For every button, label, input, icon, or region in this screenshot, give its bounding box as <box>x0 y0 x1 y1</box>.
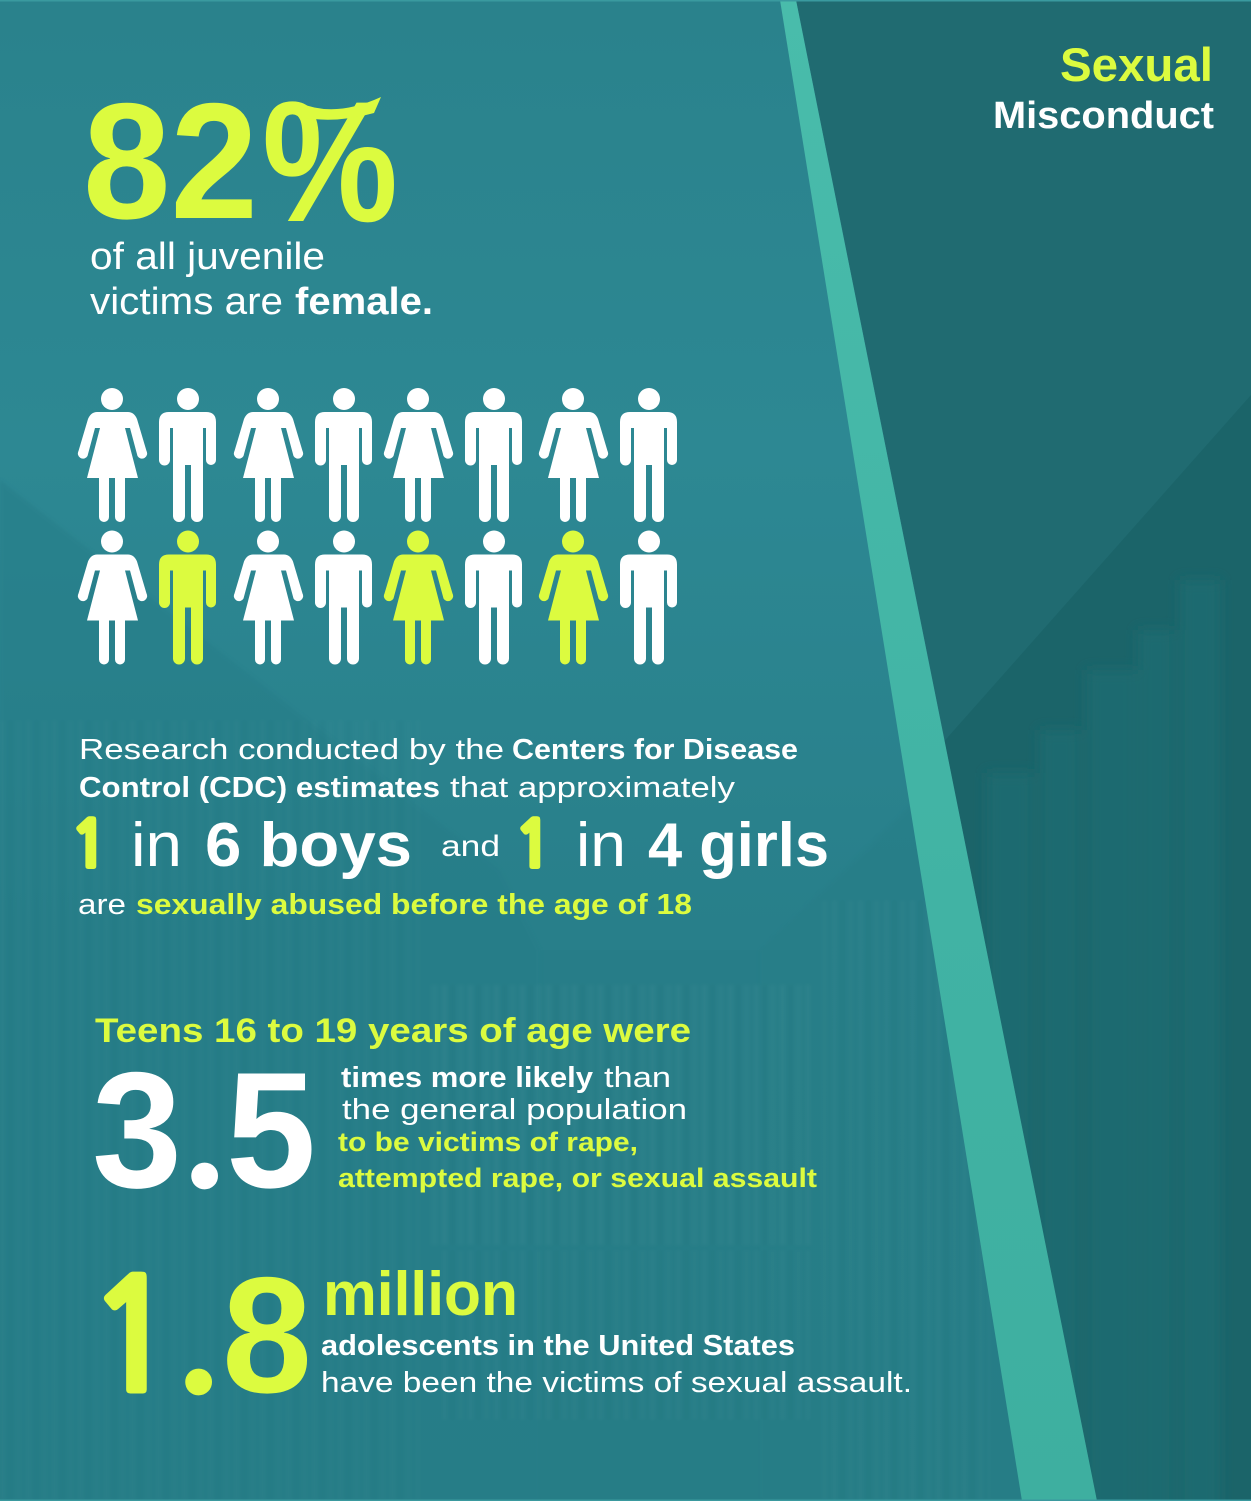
stat: 1 in 6 boys and 1 in 4 girls: and <box>441 830 500 863</box>
text block: CDC research: sexually abused before the age of 18 <box>136 889 692 921</box>
figure: row 2, 7 highlighted <box>539 530 608 664</box>
stat: 1 in 6 boys and 1 in 4 girls: 4 girls <box>648 811 829 880</box>
text block: CDC research <box>70 734 829 921</box>
stat: 1.8 million adolescents: have been the victims of sexual assault. <box>321 1367 912 1399</box>
stat: 1 in 6 boys and 1 in 4 girls: in <box>131 811 182 880</box>
figure: row 1, 2 <box>159 388 216 522</box>
stat: 1 in 6 boys and 1 in 4 girls <box>70 811 829 880</box>
figure: row 1, 6 <box>465 388 522 522</box>
stat: 1 in 6 boys and 1 in 4 girls: in <box>576 811 626 880</box>
top edge highlight <box>0 0 1251 2</box>
panel: dark right side <box>796 0 1251 1501</box>
pictogram: sixteen figures <box>78 388 677 664</box>
stat: 1.8 million adolescents <box>86 1243 912 1429</box>
stat: 1 in 6 boys and 1 in 4 girls: 1 <box>70 813 109 877</box>
stat: 82% of juvenile victims are female: % <box>262 66 398 258</box>
figure: row 2, 8 <box>620 530 677 664</box>
stat: teens 3.5 times more likely <box>92 1012 817 1223</box>
figure: row 2, 2 highlighted <box>159 530 216 664</box>
stat: 82% of juvenile victims are female: female. <box>295 281 433 323</box>
stat: teens 3.5 times more likely: to be victims of rape, <box>338 1127 638 1157</box>
text block: CDC research: that approximately <box>450 772 736 804</box>
heading: Sexual Misconduct <box>993 38 1214 137</box>
stat: 1.8 million adolescents: adolescents in the United States <box>321 1330 795 1362</box>
figure: row 1, 5 <box>384 388 453 522</box>
text block: CDC research: Research conducted by the <box>79 734 504 766</box>
figure: row 2, 3 <box>234 530 303 664</box>
figure: row 1, 7 <box>539 388 608 522</box>
stat: 82% of juvenile victims are female: 82 <box>83 69 258 253</box>
heading: Sexual Misconduct: Sexual <box>1060 38 1213 91</box>
figure: row 2, 6 <box>465 530 522 664</box>
stat: 1.8 million adolescents: 8 <box>222 1243 312 1427</box>
bottom edge highlight <box>0 1500 1251 1501</box>
stat: 82% of juvenile victims are female <box>83 66 433 323</box>
stat: teens 3.5 times more likely: . <box>184 1040 225 1223</box>
figure: row 2, 4 <box>315 530 372 664</box>
heading: Sexual Misconduct: Misconduct <box>993 95 1214 137</box>
stat: 1.8 million adolescents: 1 <box>86 1262 180 1415</box>
figure: row 1, 8 <box>620 388 677 522</box>
text block: CDC research: are <box>78 889 126 921</box>
stat: 1.8 million adolescents: . <box>178 1246 219 1429</box>
stat: 82% of juvenile victims are female: victims are <box>90 281 283 323</box>
stat: teens 3.5 times more likely: Teens 16 to 19 years of age were <box>95 1012 691 1050</box>
figure: row 1, 4 <box>315 388 372 522</box>
stat: teens 3.5 times more likely: attempted rape, or sexual assault <box>338 1163 817 1193</box>
figure: row 1, 3 <box>234 388 303 522</box>
stat: teens 3.5 times more likely: 5 <box>226 1038 316 1222</box>
figure: row 2, 5 highlighted <box>384 530 453 664</box>
text block: CDC research: Centers for Disease <box>512 734 798 766</box>
stat: 1 in 6 boys and 1 in 4 girls: 6 boys <box>205 811 412 880</box>
figure: row 2, 1 <box>78 530 147 664</box>
stat: teens 3.5 times more likely: 3 <box>92 1038 182 1222</box>
stat: teens 3.5 times more likely: the general population <box>342 1094 687 1126</box>
stat: 82% of juvenile victims are female: of all juvenile <box>90 236 325 278</box>
stat: teens 3.5 times more likely: times more likely <box>341 1062 593 1094</box>
figure: row 1, 1 <box>78 388 147 522</box>
stat: 1 in 6 boys and 1 in 4 girls: 1 <box>514 813 553 877</box>
text block: CDC research: Control (CDC) estimates <box>79 772 440 804</box>
diagonal accent band <box>780 0 1097 1501</box>
stat: teens 3.5 times more likely: than <box>604 1062 671 1094</box>
stat: 1.8 million adolescents: million <box>323 1260 518 1329</box>
